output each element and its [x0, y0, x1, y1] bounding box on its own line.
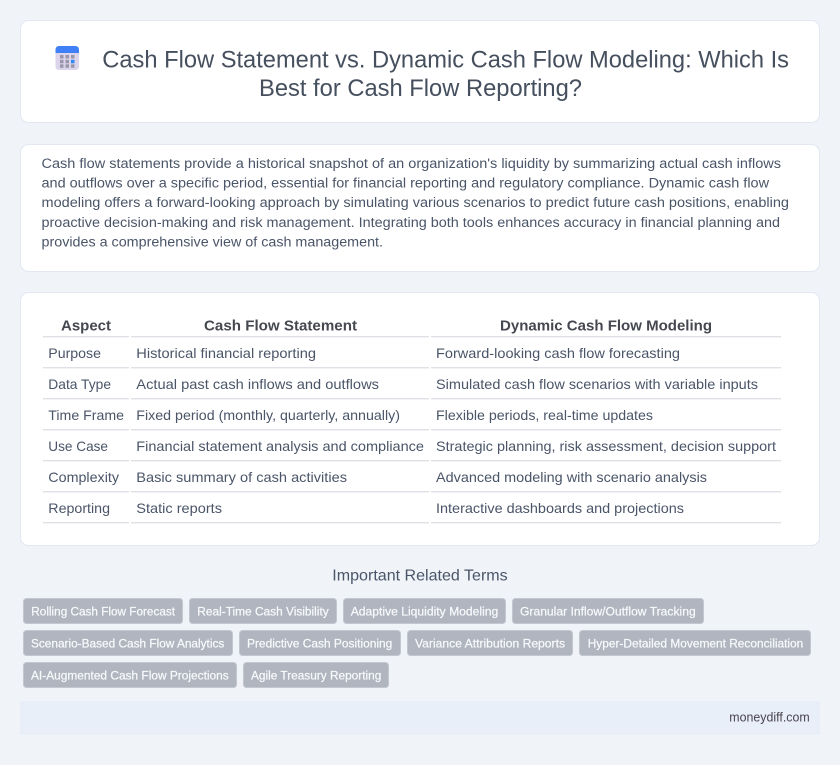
- table row: purpose: Purpose: [48, 345, 101, 361]
- tag: [244, 662, 388, 688]
- table row: purpose: Historical financial reporting: [136, 345, 316, 361]
- table row: use case: Use Case: [48, 438, 108, 454]
- intro paragraph: and outflows over a specific period, essential for financial reporting and regulatory compliance. Dynamic cash flow: [42, 176, 770, 192]
- tag: Variance Attribution Reports: [415, 636, 565, 650]
- table row: complexity: Advanced modeling with scenario analysis: [436, 469, 707, 485]
- table row: time frame: [48, 407, 653, 423]
- intro paragraph: [42, 156, 789, 250]
- table row: reporting: [48, 500, 684, 516]
- tag: [190, 598, 336, 624]
- tag: [512, 598, 704, 624]
- panel: intro summary: [20, 144, 820, 272]
- table row: complexity: Complexity: [48, 469, 119, 485]
- intro paragraph: Cash flow statements provide a historical snapshot of an organization's liquidity by summarizing actual cash inflows: [42, 156, 781, 172]
- table row: data type: [48, 376, 758, 392]
- tag: [240, 630, 400, 656]
- table header: [61, 319, 712, 335]
- table row: use case: Strategic planning, risk assessment, decision support: [436, 438, 776, 454]
- tag: AI-Augmented Cash Flow Projections: [31, 668, 229, 682]
- table row: complexity: [48, 469, 707, 485]
- tag: [24, 630, 232, 656]
- intro paragraph: provides a comprehensive view of cash management.: [42, 234, 383, 250]
- title: [102, 46, 789, 102]
- table row: data type: Data Type: [48, 376, 111, 392]
- tag: Scenario-Based Cash Flow Analytics: [31, 636, 224, 650]
- table row: reporting: Interactive dashboards and projections: [436, 500, 684, 516]
- table row: time frame: Fixed period (monthly, quarterly, annually): [136, 407, 400, 423]
- tag: Agile Treasury Reporting: [251, 668, 381, 682]
- tag: [408, 630, 572, 656]
- tag: [344, 598, 506, 624]
- table header: Aspect: [61, 319, 111, 335]
- tag: Real-Time Cash Visibility: [197, 604, 330, 618]
- table row: data type: Simulated cash flow scenarios with variable inputs: [436, 376, 758, 392]
- tag: [580, 630, 810, 656]
- tag: [24, 598, 182, 624]
- icon: calendar: [56, 46, 79, 70]
- table header: Dynamic Cash Flow Modeling: [500, 319, 712, 335]
- title: Cash Flow Statement vs. Dynamic Cash Flow Modeling: Which Is: [102, 46, 789, 73]
- heading: important related terms: Important Related Terms: [332, 568, 508, 585]
- table row: purpose: [48, 345, 680, 361]
- table row: use case: [48, 438, 776, 454]
- table row: use case: Financial statement analysis and compliance: [136, 438, 424, 454]
- table row: reporting: Reporting: [48, 500, 110, 516]
- table row: purpose: Forward-looking cash flow forecasting: [436, 345, 680, 361]
- panel: title header: [20, 20, 820, 122]
- panel: comparison table: [20, 292, 820, 546]
- tag: Rolling Cash Flow Forecast: [31, 604, 176, 618]
- table row: reporting: Static reports: [136, 500, 222, 516]
- table row: time frame: Flexible periods, real-time updates: [436, 407, 653, 423]
- table row: time frame: Time Frame: [48, 407, 124, 423]
- footer bar: [20, 701, 820, 735]
- table row: data type: Actual past cash inflows and outflows: [136, 376, 379, 392]
- tag: Granular Inflow/Outflow Tracking: [520, 604, 696, 618]
- title: Best for Cash Flow Reporting?: [259, 75, 582, 102]
- tag: Predictive Cash Positioning: [247, 636, 392, 650]
- tags: related terms: [24, 598, 810, 688]
- tag: Hyper-Detailed Movement Reconciliation: [588, 636, 803, 650]
- table row: complexity: Basic summary of cash activities: [136, 469, 347, 485]
- footer source text: moneydiff.com: [729, 710, 810, 725]
- tag: [24, 662, 236, 688]
- tag: Adaptive Liquidity Modeling: [351, 604, 498, 618]
- table header: Cash Flow Statement: [204, 319, 357, 335]
- intro paragraph: modeling offers a forward-looking approach by simulating various scenarios to predict future cash positions, enabling: [42, 195, 789, 211]
- intro paragraph: proactive decision-making and risk management. Integrating both tools enhances accuracy in financial planning and: [42, 215, 780, 231]
